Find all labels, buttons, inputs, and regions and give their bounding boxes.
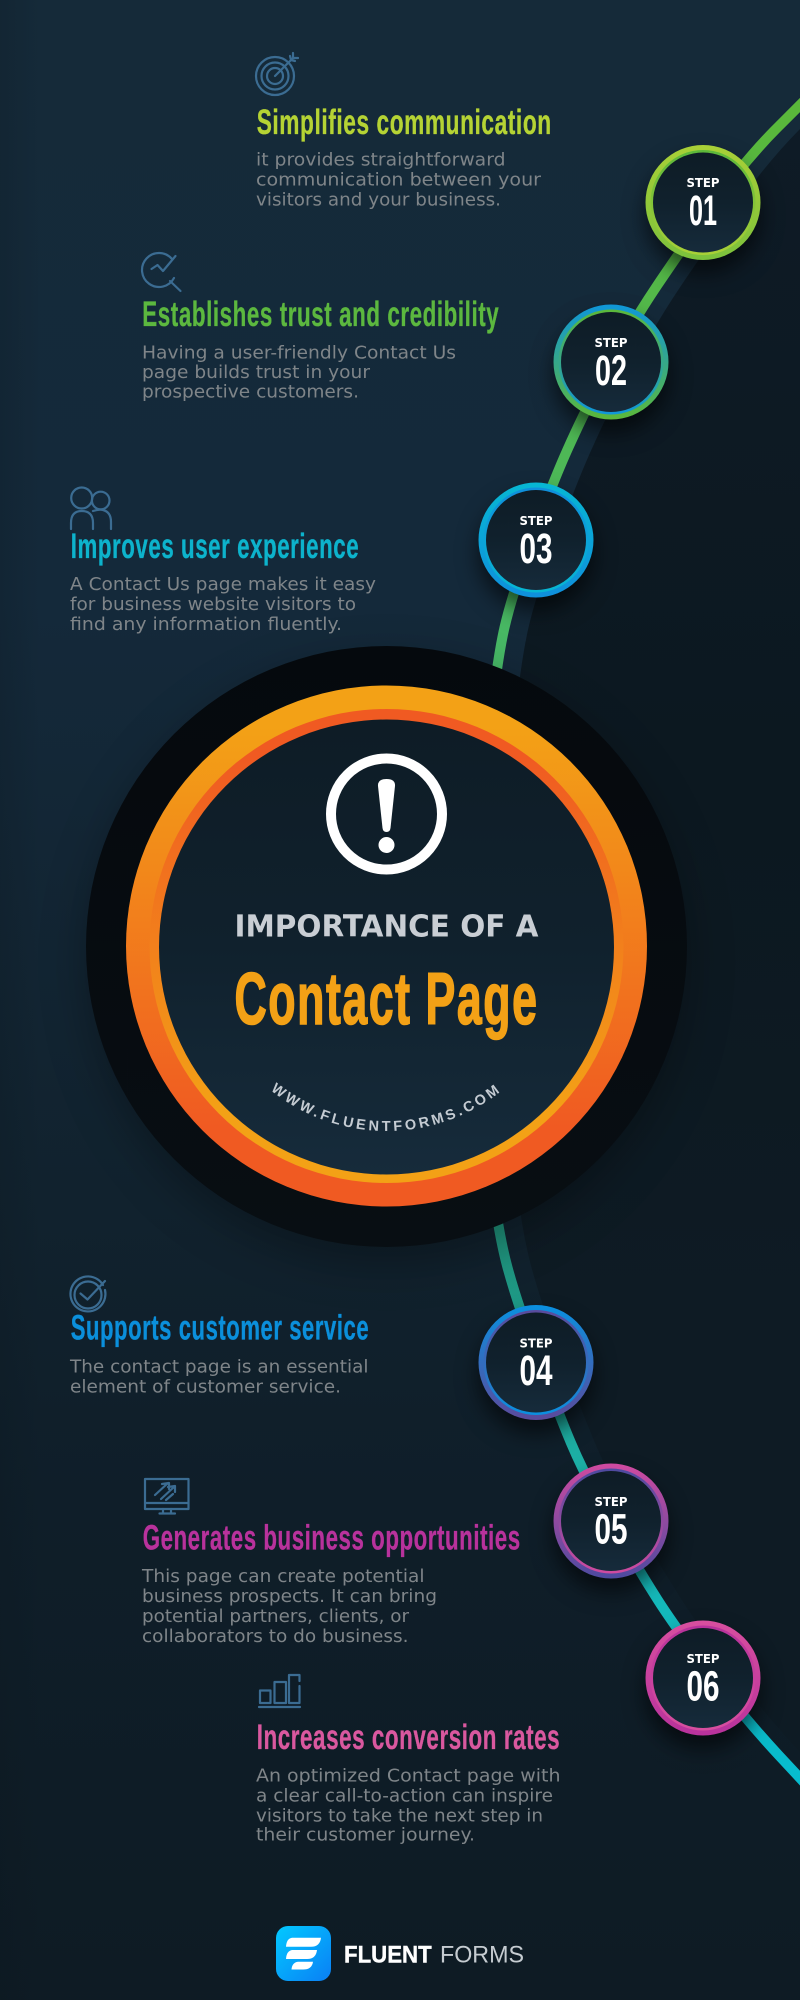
description [69, 1358, 368, 1398]
wordmark: FLUENT [344, 1941, 432, 1968]
icon: target [256, 53, 298, 95]
step 05: STEP [594, 1495, 628, 1509]
description: prospective customers. [142, 382, 359, 402]
step 06 [646, 1620, 760, 1736]
description: a clear call-to-action can inspire [256, 1786, 553, 1806]
panel: simplifies communication [256, 53, 552, 210]
icon: check circle [70, 1276, 105, 1311]
step 04: 04 [520, 1347, 553, 1395]
description: it provides straightforward [256, 150, 506, 170]
description: page builds trust in your [142, 363, 371, 383]
outer orange ring [126, 686, 647, 1206]
description [141, 1567, 437, 1647]
description: This page can create potential [141, 1567, 424, 1587]
step 01: 01 [689, 187, 717, 235]
panel: establishes trust and credibility [142, 253, 499, 402]
icon: magnifier chart [142, 253, 180, 291]
description: communication between your [256, 170, 542, 190]
description [142, 344, 456, 402]
icon: logo mark [276, 1926, 331, 1981]
logo: fluent forms [276, 1926, 524, 1981]
description: collaborators to do business. [142, 1627, 408, 1647]
curved website url: WWW.FLUENTFORMS.COM [272, 1082, 500, 1131]
description: find any information fluently. [70, 615, 342, 635]
title: Improves user experience [71, 527, 359, 566]
description [256, 150, 542, 210]
step 06: 06 [686, 1662, 720, 1710]
step 02: STEP [594, 336, 628, 350]
panel: generates business opportunities [141, 1479, 521, 1647]
title: Simplifies communication [257, 103, 552, 142]
title: Establishes trust and credibility [142, 295, 499, 334]
step 05: 05 [594, 1506, 628, 1554]
step 02 [554, 304, 668, 420]
step 03 [478, 482, 594, 598]
panel: supports customer service [69, 1276, 369, 1398]
description: business prospects. It can bring [142, 1587, 437, 1607]
step 04 [478, 1305, 594, 1420]
step 02: 02 [595, 347, 627, 395]
step 05 [554, 1464, 668, 1578]
title: Increases conversion rates [257, 1718, 560, 1757]
connecting path line [479, 93, 800, 1791]
description: An optimized Contact page with [256, 1766, 560, 1786]
description [256, 1766, 560, 1846]
description: The contact page is an essential [69, 1358, 368, 1378]
panel: increases conversion rates [256, 1675, 560, 1846]
step 01: STEP [686, 176, 720, 190]
logo: fluent forms: FORMS [440, 1941, 524, 1968]
description [70, 575, 376, 635]
step 06: STEP [686, 1652, 720, 1666]
central badge [86, 646, 687, 1261]
panel: improves user experience [70, 488, 376, 635]
title: Supports customer service [71, 1309, 369, 1348]
step 03: STEP [520, 514, 553, 528]
description: A Contact Us page makes it easy [70, 575, 376, 595]
description: potential partners, clients, or [142, 1607, 410, 1627]
description: element of customer service. [70, 1378, 341, 1398]
description: for business website visitors to [70, 595, 356, 615]
dark region right of the path [503, 93, 800, 1791]
heading: contact page: Contact Page [234, 959, 538, 1040]
heading: importance of a: IMPORTANCE OF A [234, 910, 539, 944]
icon: users [71, 488, 111, 529]
icon: exclamation mark [331, 758, 442, 870]
description: their customer journey. [256, 1826, 475, 1846]
description: Having a user-friendly Contact Us [142, 344, 456, 364]
step 01 [646, 145, 760, 260]
description: visitors to take the next step in [256, 1806, 543, 1826]
step 04: STEP [520, 1336, 553, 1350]
icon: bar chart [259, 1675, 300, 1707]
icon: monitor with arrows [145, 1479, 188, 1514]
title: Generates business opportunities [143, 1518, 521, 1557]
step 03: 03 [520, 525, 552, 573]
description: visitors and your business. [256, 190, 501, 210]
